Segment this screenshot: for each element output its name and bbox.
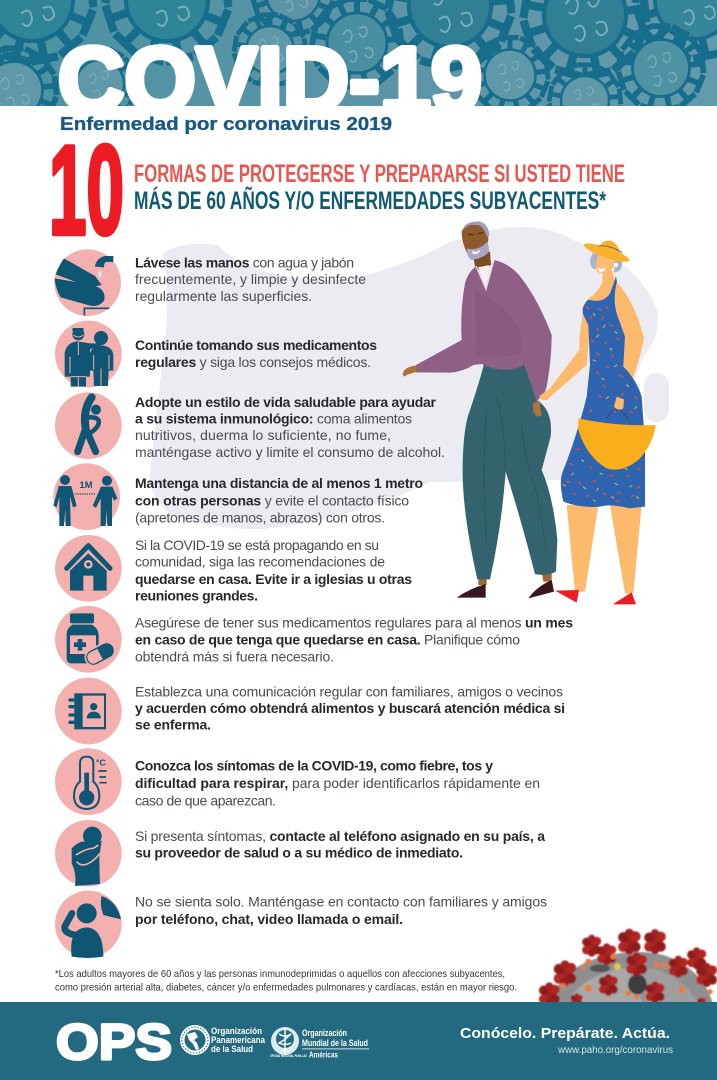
text: step 6	[135, 614, 573, 664]
logo text: Organización Mundial de la Salud: OFICINA REGIONAL PARA LAS	[270, 1053, 307, 1058]
text: step 7: se enferma.	[135, 716, 211, 732]
text: step 8	[135, 758, 540, 808]
icon: contact book	[55, 678, 122, 744]
icon: person coughing	[55, 820, 122, 887]
text: step 2	[135, 337, 377, 370]
text: step 5: Si la COVID-19 se está propagando en su	[135, 537, 379, 553]
text: step 4: Mantenga una distancia de al menos 1 metro	[135, 475, 423, 491]
footer band	[0, 1002, 717, 1080]
text: step 5: reuniones grandes.	[135, 588, 258, 604]
heading	[134, 160, 625, 215]
footnote: como presión arterial alta, diabetes, cáncer y/o enfermedades pulmonares y cardíacas, están en mayor riesgo.	[55, 982, 517, 994]
logo text: Organización Mundial de la Salud: Organización	[302, 1028, 347, 1039]
text: step 1: Lávese las manos con agua y jabón	[135, 254, 354, 270]
logo text: Organización Panamericana de la Salud	[211, 1026, 266, 1055]
icon circles	[53, 249, 122, 602]
icon: one metre distance	[53, 463, 120, 530]
text: step 8: dificultad para respirar, para poder identificarlos rápidamente en	[135, 775, 540, 791]
icon: washing hands	[54, 249, 121, 316]
text: step 8: caso de que aparezcan.	[135, 792, 276, 808]
icon: doctor and patient	[55, 321, 122, 387]
man	[403, 221, 557, 598]
logo text: Organización Panamericana de la Salud: de la Salud	[211, 1044, 253, 1055]
logo: PAHO seal	[180, 1025, 210, 1055]
text: step 2: regulares y siga los consejos médicos.	[135, 354, 371, 370]
logo: OPS: OPS	[56, 1014, 172, 1070]
icon: person on phone	[55, 891, 122, 958]
text: step 6: Asegúrese de tener sus medicamentos regulares para al menos un mes	[135, 614, 573, 630]
text: step 5: quedarse en casa. Evite ir a iglesias u otras	[135, 571, 412, 587]
website: www.paho.org/coronavirus	[557, 1044, 673, 1056]
subtitle: Enfermedad por coronavirus 2019	[60, 114, 392, 134]
text: step 4: (apretones de manos, abrazos) con otros.	[135, 510, 385, 526]
text: step 9: Si presenta síntomas, contacte al teléfono asignado en su país, a	[135, 828, 545, 844]
text: step 10: por teléfono, chat, video llamada o email.	[135, 911, 403, 927]
footnote	[55, 968, 517, 994]
logo text: Organización Panamericana de la Salud: Organización	[211, 1026, 262, 1037]
text: step 10	[135, 894, 547, 927]
background blob	[150, 227, 669, 529]
text: step 1	[135, 254, 366, 304]
icon: medicine bottle and pill	[55, 606, 122, 673]
text: step 7: Establezca una comunicación regular con familiares, amigos o vecinos	[135, 684, 563, 700]
text: step 1: regularmente las superficies.	[135, 288, 312, 304]
icon: person exercising	[55, 392, 122, 459]
woman	[539, 240, 656, 604]
logo text: Organización Panamericana de la Salud: Panamericana	[211, 1035, 266, 1046]
text: step 5	[135, 537, 412, 604]
text: step 4: con otras personas y evite el contacto físico	[135, 492, 409, 508]
text: step 3: a su sistema inmunológico: coma alimentos	[135, 410, 412, 426]
text: step 9	[135, 828, 545, 860]
text: step 9: su proveedor de salud o a su médico de inmediato.	[135, 844, 463, 860]
text: step 5: comunidad, siga las recomendaciones de	[135, 554, 385, 570]
text: step 8: Conozca los síntomas de la COVID-19, como fiebre, tos y	[135, 758, 493, 774]
footnote: *Los adultos mayores de 60 años y las personas inmunodeprimidas o aquellos con afecciones subyacentes,	[55, 968, 505, 980]
text: step 6: en caso de que tenga que quedarse en casa. Planifique cómo	[135, 632, 520, 648]
logo text: Organización Mundial de la Salud: Mundial de la Salud	[302, 1038, 368, 1049]
title: COVID-19: COVID-19	[58, 29, 482, 131]
text: step 3: nutritivos, duerma lo suficiente, no fume,	[135, 427, 391, 443]
text: step 7: y acuerden cómo obtendrá alimentos y buscará atención médica si	[135, 700, 565, 716]
text: step 1: frecuentemente, y limpie y desinfecte	[135, 271, 366, 287]
text: step 7	[135, 684, 565, 732]
logo text: Organización Mundial de la Salud	[270, 1028, 369, 1060]
text: step 6: obtendrá más si fuera necesario.	[135, 648, 334, 664]
icon: thermometer	[55, 748, 122, 815]
slogan: Conócelo. Prepárate. Actúa.	[460, 1025, 670, 1042]
text: step 3: manténgase activo y limite el consumo de alcohol.	[135, 444, 445, 460]
text: step 2: Continúe tomando sus medicamentos	[135, 337, 377, 353]
logo text: Organización Mundial de la Salud: Américas	[309, 1050, 338, 1060]
header band with virus pattern	[0, 0, 717, 106]
text: step 4	[135, 475, 423, 526]
text: step 3: Adopte un estilo de vida saludable para ayudar	[135, 394, 437, 410]
number 10: 10	[49, 119, 124, 261]
coronavirus image	[539, 929, 717, 1007]
label: degrees C: °C	[96, 758, 106, 768]
text: step 10: No se sienta solo. Manténgase en contacto con familiares y amigos	[135, 894, 547, 910]
icon: house	[55, 535, 122, 602]
text: step 3	[135, 394, 445, 460]
illustration: older couple	[403, 221, 656, 604]
logo: WHO emblem	[271, 1027, 299, 1055]
label: 1M: 1M	[80, 480, 93, 490]
